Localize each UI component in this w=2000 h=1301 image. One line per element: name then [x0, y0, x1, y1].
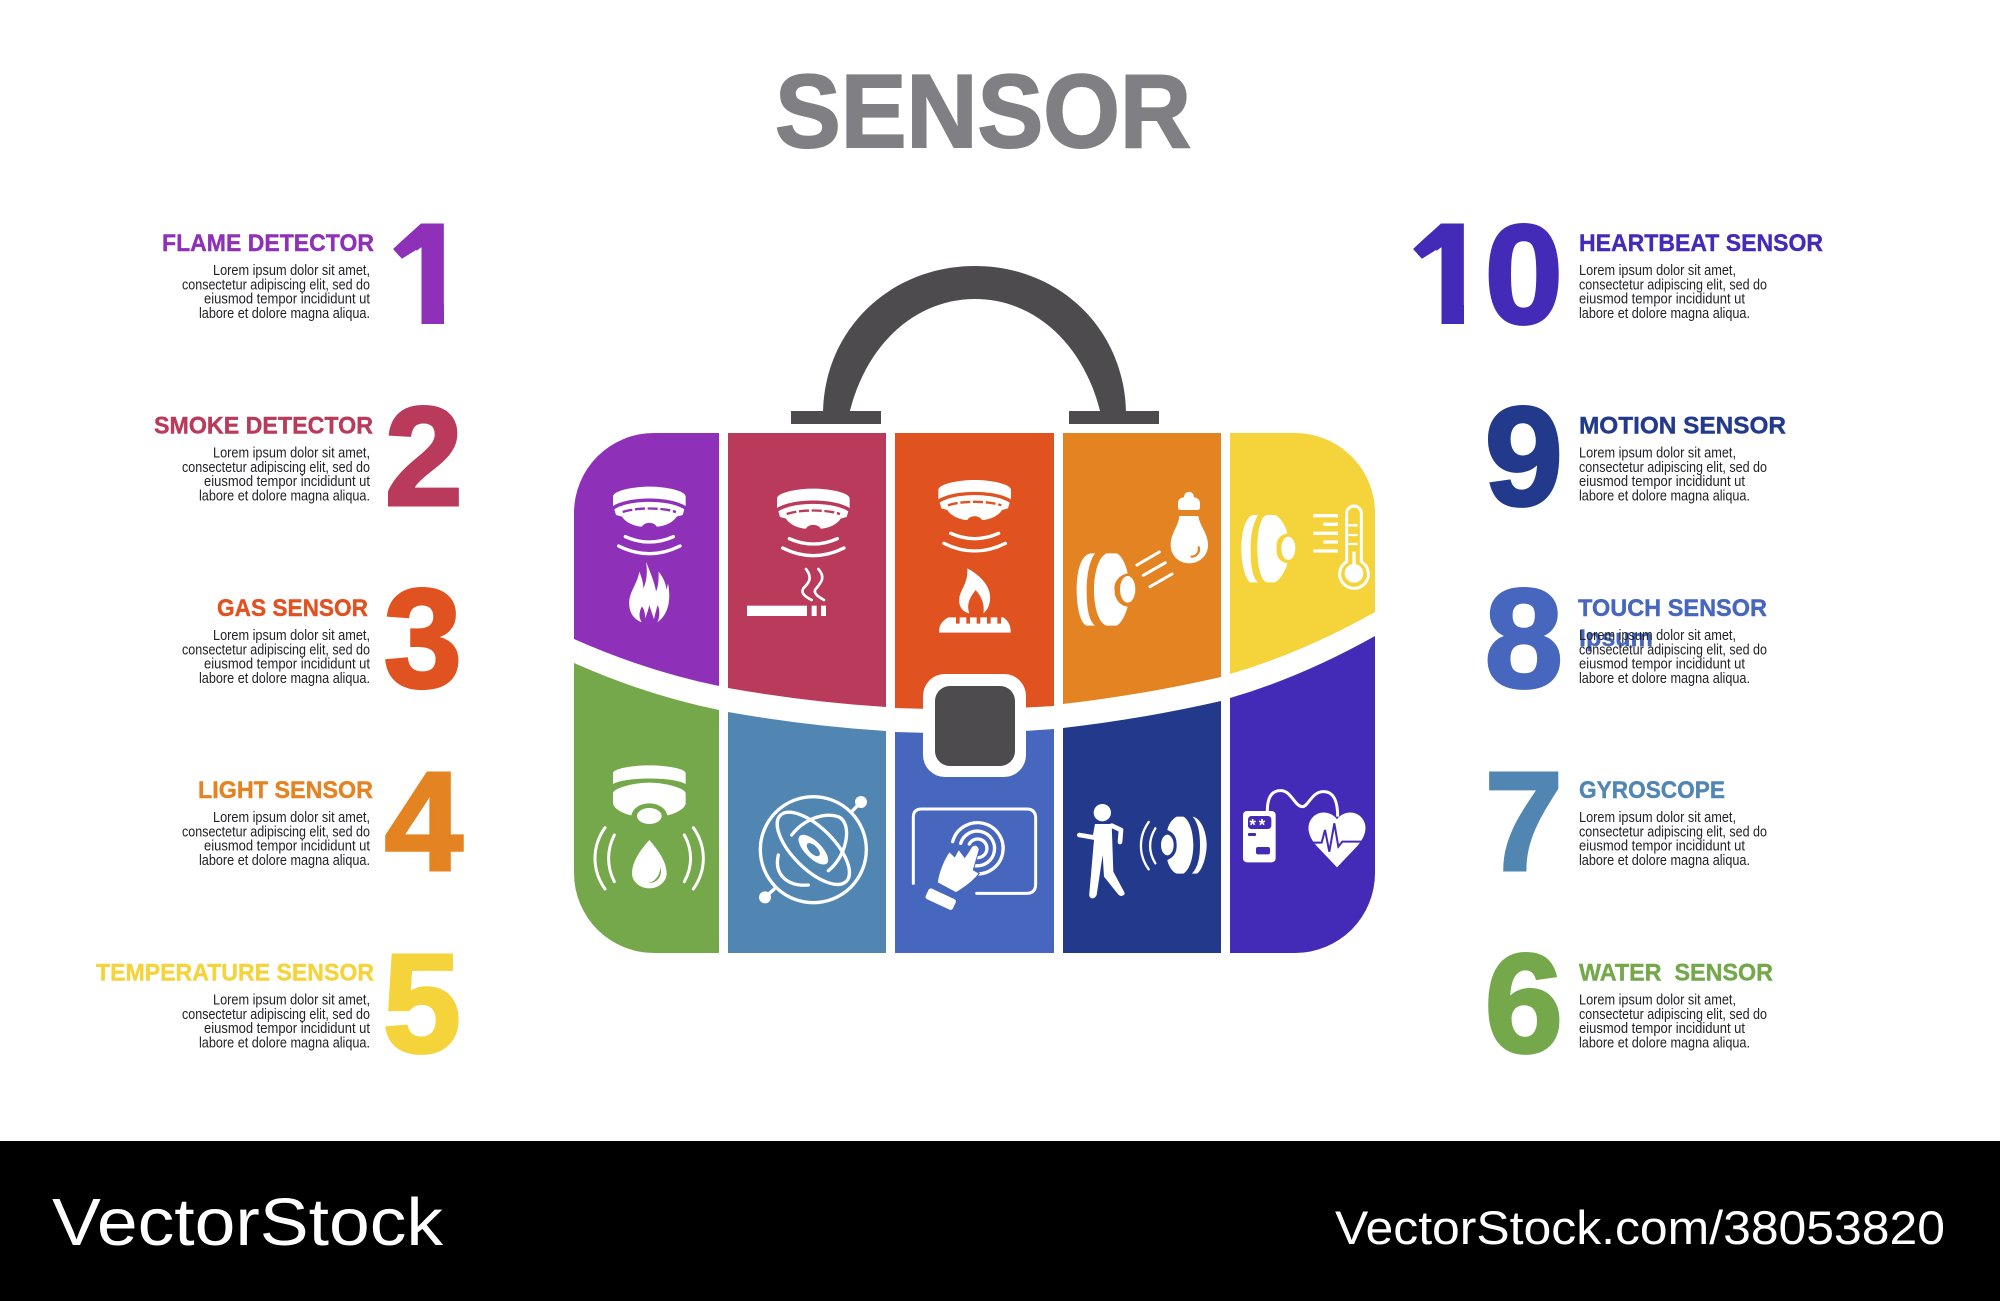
- number 10: 1: [1408, 195, 1486, 353]
- body text: Lorem ipsum dolor sit amet,: [1579, 628, 1736, 644]
- stray word behind body text: Ipsum: [1579, 625, 1653, 652]
- body text: [1579, 628, 1767, 687]
- body text: labore et dolore magna aliqua.: [199, 306, 370, 322]
- body text: consectetur adipiscing elit, sed do: [1579, 460, 1767, 476]
- heading: HEARTBEAT SENSOR: [1579, 230, 1823, 257]
- heading: FLAME DETECTOR: [162, 230, 374, 257]
- panel: touch sensor: [895, 729, 1054, 953]
- number 1: 1: [388, 195, 466, 353]
- panel: smoke detector: [728, 433, 886, 707]
- body text: labore et dolore magna aliqua.: [1579, 853, 1750, 869]
- body text: [1579, 810, 1767, 869]
- panel: motion sensor: [1063, 701, 1221, 953]
- item 10: heartbeat sensor: [1413, 223, 1823, 326]
- body text: eiusmod tempor incididunt ut: [1579, 656, 1745, 672]
- number 7: 7: [1485, 742, 1563, 900]
- body text: consectetur adipiscing elit, sed do: [182, 642, 370, 658]
- item 2: smoke detector: [154, 377, 463, 535]
- number 4: 4: [385, 742, 463, 900]
- icon: water sensor: [595, 765, 703, 889]
- body text: eiusmod tempor incididunt ut: [204, 292, 370, 308]
- title: SENSOR: [775, 54, 1191, 170]
- body text: eiusmod tempor incididunt ut: [1579, 474, 1745, 490]
- body text: [1579, 263, 1767, 322]
- body text: eiusmod tempor incididunt ut: [1579, 839, 1745, 855]
- item 3: gas sensor: [182, 559, 462, 717]
- heading: MOTION SENSOR: [1579, 412, 1786, 439]
- icon: flame detector: [613, 487, 686, 622]
- number 2: 2: [385, 377, 463, 535]
- body text: labore et dolore magna aliqua.: [1579, 1036, 1750, 1052]
- body text: eiusmod tempor incididunt ut: [1579, 292, 1745, 308]
- item 9: motion sensor: [1485, 377, 1786, 535]
- body text: eiusmod tempor incididunt ut: [204, 474, 370, 490]
- body text: eiusmod tempor incididunt ut: [204, 656, 370, 672]
- heading: LIGHT SENSOR: [198, 777, 373, 804]
- number 5: 5: [383, 924, 461, 1082]
- number 6: 6: [1485, 924, 1563, 1082]
- heading: GAS SENSOR: [217, 595, 368, 622]
- panel: light sensor: [1063, 433, 1221, 704]
- body text: consectetur adipiscing elit, sed do: [1579, 278, 1767, 294]
- body text: labore et dolore magna aliqua.: [199, 671, 370, 687]
- body text: Lorem ipsum dolor sit amet,: [213, 993, 370, 1009]
- body text: consectetur adipiscing elit, sed do: [182, 278, 370, 294]
- heading: TEMPERATURE SENSOR: [96, 960, 374, 987]
- body text: consectetur adipiscing elit, sed do: [1579, 825, 1767, 841]
- footer logo: VectorStock: [52, 1185, 444, 1260]
- body text: consectetur adipiscing elit, sed do: [182, 1007, 370, 1023]
- body text: labore et dolore magna aliqua.: [1579, 671, 1750, 687]
- buckle: [923, 674, 1026, 777]
- body text: labore et dolore magna aliqua.: [199, 488, 370, 504]
- body text: Lorem ipsum dolor sit amet,: [213, 628, 370, 644]
- body text: [182, 628, 370, 687]
- body text: labore et dolore magna aliqua.: [199, 853, 370, 869]
- body text: consectetur adipiscing elit, sed do: [1579, 1007, 1767, 1023]
- icon: heartbeat sensor: [1243, 791, 1365, 867]
- footer image id: VectorStock.com/38053820: [1335, 1201, 1945, 1254]
- number 9: 9: [1485, 377, 1563, 535]
- icon: heartbeat sensor: **: [1249, 816, 1268, 835]
- panel: gas sensor: [895, 433, 1054, 709]
- body text: eiusmod tempor incididunt ut: [1579, 1021, 1745, 1037]
- number 10: [1413, 223, 1559, 326]
- body text: eiusmod tempor incididunt ut: [204, 1021, 370, 1037]
- body text: consectetur adipiscing elit, sed do: [1579, 642, 1767, 658]
- number 10: 0: [1485, 195, 1563, 353]
- body text: [182, 263, 370, 322]
- body text: [182, 993, 370, 1052]
- icon: smoke detector: [747, 489, 850, 616]
- panel: flame detector: [574, 433, 719, 686]
- body text: [1579, 445, 1767, 504]
- body text: [182, 445, 370, 504]
- body text: Lorem ipsum dolor sit amet,: [1579, 445, 1736, 461]
- body text: labore et dolore magna aliqua.: [1579, 488, 1750, 504]
- icon: gas sensor: [938, 480, 1011, 633]
- heading: GYROSCOPE: [1579, 777, 1725, 804]
- body text: consectetur adipiscing elit, sed do: [182, 460, 370, 476]
- number 3: 3: [384, 559, 462, 717]
- briefcase: [574, 266, 1375, 953]
- icon: light sensor: [1077, 492, 1208, 626]
- heading: SMOKE DETECTOR: [154, 412, 373, 439]
- body text: Lorem ipsum dolor sit amet,: [213, 445, 370, 461]
- item 7: gyroscope: [1485, 742, 1767, 900]
- panel: heartbeat sensor: [1230, 636, 1375, 953]
- icon: touch sensor: [913, 809, 1036, 911]
- icon: temperature sensor: [1241, 506, 1368, 588]
- icon: gyroscope: [759, 796, 867, 903]
- item 5: temperature sensor: [96, 924, 461, 1082]
- number 8: 8: [1485, 559, 1563, 717]
- item 8: touch sensor: [1485, 559, 1767, 717]
- panel: water sensor: [574, 663, 719, 953]
- panel: temperature sensor: [1230, 433, 1375, 674]
- footer bar: [0, 1141, 2000, 1301]
- body text: consectetur adipiscing elit, sed do: [182, 825, 370, 841]
- item 1: flame detector: [163, 224, 444, 324]
- body text: Lorem ipsum dolor sit amet,: [1579, 810, 1736, 826]
- item 6: water sensor: [1485, 924, 1773, 1082]
- body text: labore et dolore magna aliqua.: [1579, 306, 1750, 322]
- body text: Lorem ipsum dolor sit amet,: [213, 810, 370, 826]
- body text: [1579, 993, 1767, 1052]
- body text: [182, 810, 370, 869]
- heading: WATER SENSOR: [1579, 960, 1773, 987]
- handle: [791, 266, 1159, 424]
- panel: gyroscope: [728, 712, 886, 953]
- body text: Lorem ipsum dolor sit amet,: [1579, 263, 1736, 279]
- icon: motion sensor: [1079, 804, 1207, 898]
- body text: Lorem ipsum dolor sit amet,: [1579, 993, 1736, 1009]
- body text: eiusmod tempor incididunt ut: [204, 839, 370, 855]
- body text: labore et dolore magna aliqua.: [199, 1036, 370, 1052]
- heading: TOUCH SENSOR: [1578, 595, 1767, 622]
- body text: Lorem ipsum dolor sit amet,: [213, 263, 370, 279]
- item 4: light sensor: [182, 742, 463, 900]
